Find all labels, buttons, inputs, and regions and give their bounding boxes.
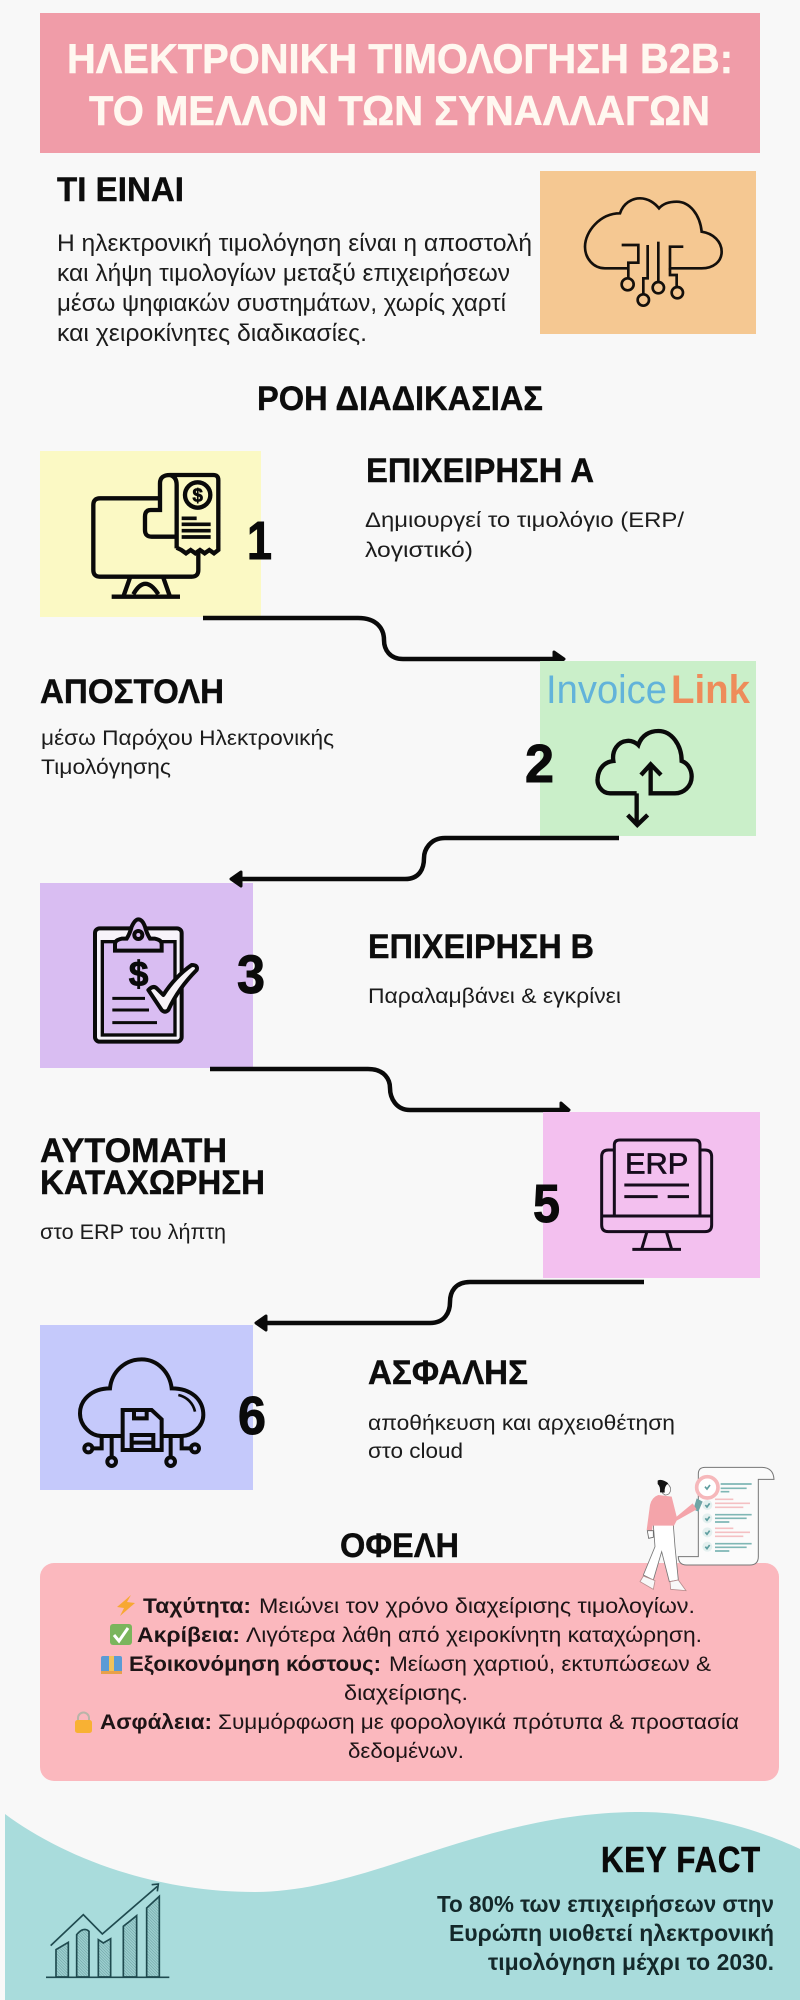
title banner: ΤΟ ΜΕΛΛΟΝ ΤΩΝ ΣΥΝΑΛΛΑΓΩΝ xyxy=(89,87,710,134)
text: key fact: Το 80% των επιχειρήσεων στην xyxy=(437,1891,774,1917)
benefit: cost saving xyxy=(101,1653,711,1705)
benefit: accuracy: Λιγότερα λάθη από χειροκίνητη καταχώρηση. xyxy=(246,1624,702,1647)
benefit: cost saving: Εξοικονόμηση κόστους: xyxy=(129,1653,381,1676)
panel: orange cloud tile xyxy=(540,171,756,334)
icon: clipboard with checkmark: $ xyxy=(129,955,148,994)
text: sending description: μέσω Παρόχου Ηλεκτρονικής xyxy=(41,727,334,750)
panel: pink tile xyxy=(543,1112,760,1278)
arrow: step 3 to step 5 xyxy=(210,1069,569,1117)
woman figure xyxy=(640,1480,703,1591)
text: company A description: λογιστικό) xyxy=(365,539,473,562)
benefit: security xyxy=(75,1711,739,1763)
icon: monitor with invoice xyxy=(93,475,218,597)
step 5 xyxy=(40,1112,760,1278)
step 3 xyxy=(40,883,621,1068)
panel: purple tile xyxy=(40,883,253,1068)
heading: automatic entry xyxy=(40,1132,265,1202)
heading: sending: ΑΠΟΣΤΟΛΗ xyxy=(40,673,224,711)
heading: company B: ΕΠΙΧΕΙΡΗΣΗ Β xyxy=(368,928,594,966)
icon: ERP monitor: ERP xyxy=(625,1148,688,1180)
text block: definition: Η ηλεκτρονική τιμολόγηση είναι η αποστολή xyxy=(57,230,532,257)
benefit: security: Συμμόρφωση με φορολογικά πρότυπα & προστασία xyxy=(218,1711,739,1734)
benefit: speed xyxy=(117,1595,695,1618)
icon: ERP monitor xyxy=(602,1140,712,1249)
benefit: cost saving: Μείωση χαρτιού, εκτυπώσεων & xyxy=(389,1653,711,1676)
section: what it is xyxy=(57,171,756,347)
benefit: security: Ασφάλεια: xyxy=(100,1711,212,1734)
number 1: 1 xyxy=(247,511,272,571)
heading: company A: ΕΠΙΧΕΙΡΗΣΗ Α xyxy=(366,452,594,490)
heading: automatic entry: ΚΑΤΑΧΩΡΗΣΗ xyxy=(40,1164,265,1202)
icon: monitor with invoice: $ xyxy=(192,484,203,505)
panel: blue tile xyxy=(40,1325,253,1490)
title banner: ΗΛΕΚΤΡΟΝΙΚΗ ΤΙΜΟΛΟΓΗΣΗ B2B: xyxy=(67,35,733,82)
text: secure description: στο cloud xyxy=(368,1440,463,1463)
benefit: speed: Μειώνει τον χρόνο διαχείρισης τιμολογίων. xyxy=(259,1595,695,1618)
text: company A description: Δημιουργεί το τιμολόγιο (ERP/ xyxy=(365,509,684,532)
text: sending description: Τιμολόγησης xyxy=(41,756,171,779)
number 5: 5 xyxy=(533,1174,560,1234)
step 6 xyxy=(40,1325,675,1490)
heading: automatic entry: ΑΥΤΟΜΑΤΗ xyxy=(40,1132,227,1170)
icon: growth chart xyxy=(46,1884,169,1977)
text block: definition: και χειροκίνητες διαδικασίες. xyxy=(57,320,367,347)
text: secure description xyxy=(368,1412,675,1463)
text block: definition: μέσω ψηφιακών συστημάτων, χωρίς χαρτί xyxy=(57,290,507,317)
title banner xyxy=(40,13,760,153)
heading: process flow: ΡΟΗ ΔΙΑΔΙΚΑΣΙΑΣ xyxy=(257,380,543,418)
heading: secure: ΑΣΦΑΛΗΣ xyxy=(368,1354,528,1392)
arrow: step 1 to step 2 xyxy=(203,618,564,666)
panel: key fact wave xyxy=(5,1812,800,2000)
arrow: step 5 to step 6 xyxy=(256,1282,644,1330)
number 2: 2 xyxy=(525,734,554,794)
step 2 xyxy=(40,661,756,836)
heading: what it is: ΤΙ ΕΙΝΑΙ xyxy=(57,171,184,209)
panel: yellow tile xyxy=(40,451,261,617)
logo: InvoiceLink: Link xyxy=(671,668,751,712)
step 1 xyxy=(40,451,684,617)
heading: key fact: KEY FACT xyxy=(601,1839,761,1880)
number 6: 6 xyxy=(238,1386,266,1446)
icon: cloud with floppy disk xyxy=(80,1359,203,1466)
panel: green tile xyxy=(540,661,756,836)
benefit: cost saving: διαχείρισης. xyxy=(344,1682,468,1705)
text: key fact xyxy=(437,1891,774,1975)
text: key fact: Ευρώπη υιοθετεί ηλεκτρονική xyxy=(449,1920,774,1946)
icon: circuit cloud xyxy=(585,198,722,306)
logo: InvoiceLink: Invoice xyxy=(546,668,667,712)
icon: cloud with up and down arrows xyxy=(598,731,692,825)
text: company A description xyxy=(365,509,684,562)
icon: clipboard with checkmark xyxy=(95,919,197,1042)
logo: InvoiceLink xyxy=(546,668,751,712)
arrow: step 2 to step 3 xyxy=(231,838,619,886)
illustration: woman inspecting checklist xyxy=(640,1467,774,1591)
text: sending description xyxy=(41,727,334,779)
text: company B description: Παραλαμβάνει & εγκρίνει xyxy=(368,985,621,1008)
text: automatic entry description: στο ERP του λήπτη xyxy=(40,1221,226,1244)
text block: definition xyxy=(57,230,532,347)
heading: benefits: ΟΦΕΛΗ xyxy=(340,1527,459,1565)
benefit: accuracy: Ακρίβεια: xyxy=(137,1624,240,1647)
checklist scroll xyxy=(678,1467,774,1565)
number 3: 3 xyxy=(237,945,265,1005)
text block: definition: και λήψη τιμολογίων μεταξύ επιχειρήσεων xyxy=(57,260,510,287)
benefit: speed: Ταχύτητα: xyxy=(143,1595,251,1618)
panel: benefits xyxy=(40,1563,779,1781)
benefit: security: δεδομένων. xyxy=(348,1740,464,1763)
text: secure description: αποθήκευση και αρχειοθέτηση xyxy=(368,1412,675,1435)
text: key fact: τιμολόγηση μέχρι το 2030. xyxy=(488,1949,774,1975)
